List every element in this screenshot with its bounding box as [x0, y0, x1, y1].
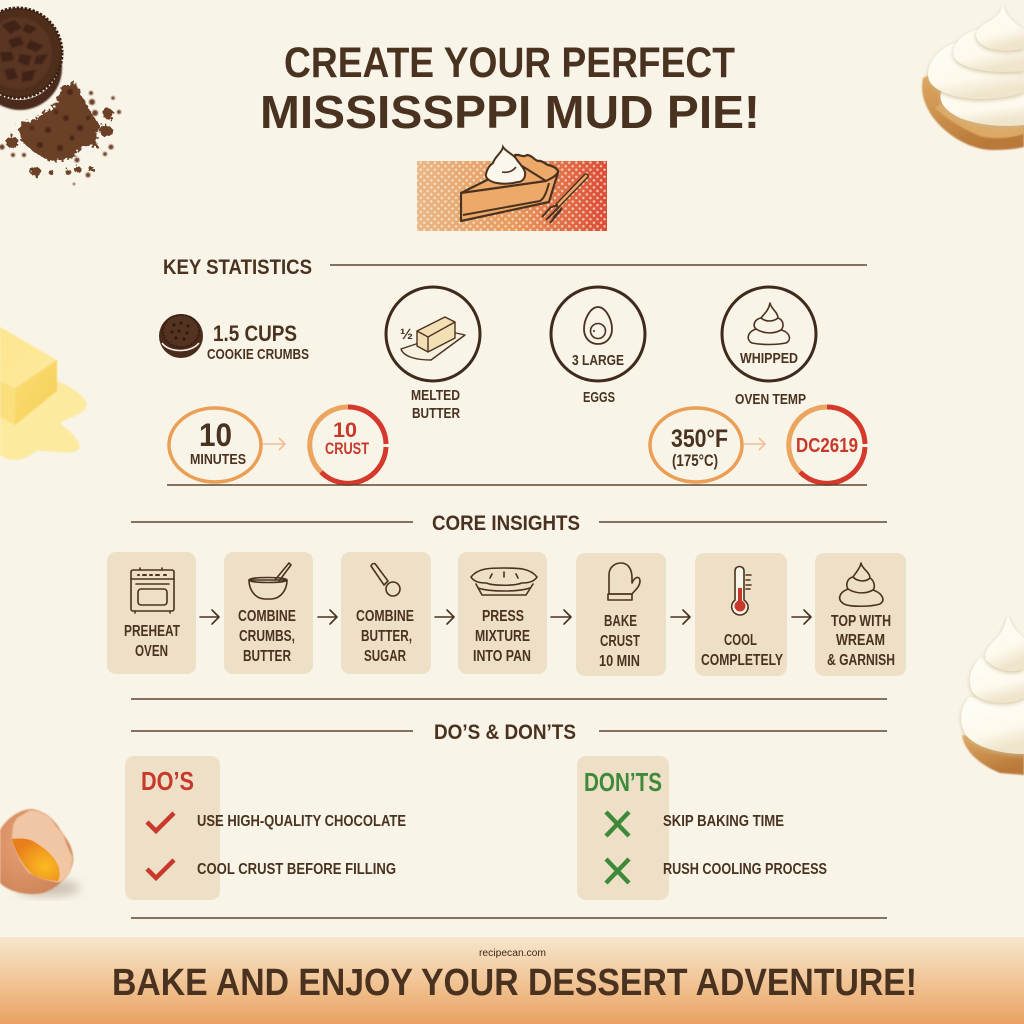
arrow — [435, 610, 454, 624]
step: combine crumbs and butter: CRUMBS, — [239, 628, 295, 645]
arrow — [551, 610, 571, 624]
image: whipped cream tart top right — [922, 5, 1024, 150]
stat: melted butter: BUTTER — [412, 405, 460, 422]
panel: do's — [125, 756, 406, 900]
arrow — [743, 438, 765, 450]
crumb pile — [6, 82, 114, 177]
slice — [461, 155, 558, 221]
icon: spoon — [371, 564, 400, 596]
stat: oven temperature: 350°F — [671, 425, 728, 453]
panel: do's: USE HIGH-QUALITY CHOCOLATE — [197, 813, 406, 830]
step: preheat oven: PREHEAT — [124, 623, 180, 640]
title — [260, 39, 760, 138]
step: press mixture into pan: PRESS — [482, 608, 524, 625]
stat: eggs: EGGS — [583, 389, 615, 406]
panel: don'ts: RUSH COOLING PROCESS — [663, 861, 827, 878]
arrow — [792, 610, 811, 624]
stat: eggs — [551, 287, 645, 406]
step: cool completely — [695, 553, 787, 676]
illustration: pie slice on halftone band — [417, 147, 607, 231]
step: combine butter and sugar: BUTTER, — [361, 628, 412, 645]
stat: oven temperature — [650, 407, 865, 483]
image: cracked egg — [0, 809, 80, 896]
step: bake crust: BAKE — [604, 613, 637, 630]
panel: don'ts: DON’TS — [584, 767, 662, 797]
step: top with cream and garnish: & GARNISH — [827, 652, 895, 669]
icon: oven — [131, 568, 174, 613]
step: press mixture into pan: MIXTURE — [475, 628, 530, 645]
icon: check — [147, 813, 174, 831]
panel: do's: DO’S — [141, 766, 194, 796]
stat: cookie crumbs: 1.5 CUPS — [213, 321, 297, 346]
icon: thermometer — [732, 566, 751, 615]
panel: don'ts: SKIP BAKING TIME — [663, 813, 784, 830]
step: combine butter and sugar — [341, 552, 431, 674]
icon: pie — [471, 568, 537, 595]
image: melted butter — [0, 327, 87, 460]
step: cool completely: COMPLETELY — [701, 652, 783, 669]
step: combine butter and sugar: SUGAR — [364, 648, 406, 665]
footer banner: recipecan.com — [479, 948, 546, 959]
step: top with cream and garnish: WREAM — [836, 632, 885, 649]
ring: crust: CRUST — [325, 439, 369, 458]
step: combine crumbs and butter: COMBINE — [238, 608, 296, 625]
icon: mixing bowl — [249, 563, 291, 599]
image: whipped cream tart right — [961, 615, 1024, 775]
step: press mixture into pan: INTO PAN — [473, 648, 531, 665]
step: top with cream and garnish: TOP WITH — [831, 613, 891, 630]
arrow — [318, 610, 337, 624]
stat: whipped cream: OVEN TEMP — [735, 391, 806, 408]
icon: egg — [584, 307, 612, 344]
step: combine butter and sugar: COMBINE — [356, 608, 414, 625]
step: bake crust: CRUST — [600, 633, 640, 650]
footer banner — [0, 937, 1024, 1024]
step: bake crust: 10 MIN — [599, 653, 640, 670]
whipped topping — [486, 147, 525, 184]
step: combine crumbs and butter: BUTTER — [243, 648, 291, 665]
footer banner: BAKE AND ENJOY YOUR DESSERT ADVENTURE! — [112, 962, 917, 1004]
stat: 10 minutes crust time: MINUTES — [190, 451, 246, 468]
step: preheat oven: OVEN — [135, 643, 168, 660]
heading: key statistics: KEY STATISTICS — [163, 256, 312, 279]
stat: whipped cream — [722, 287, 816, 408]
icon: check — [147, 860, 174, 878]
arrow — [200, 610, 219, 624]
stat: 10 minutes crust time: 10 — [199, 417, 232, 453]
panel: do's: COOL CRUST BEFORE FILLING — [197, 861, 396, 878]
icon: oven mitt — [608, 563, 640, 600]
stat: melted butter — [386, 287, 480, 422]
step: cool completely: COOL — [724, 632, 757, 649]
icon: whipped swirl — [840, 563, 883, 606]
ring: colour code: DC2619 — [796, 435, 858, 457]
arrow — [262, 438, 285, 450]
stat: whipped cream: WHIPPED — [740, 350, 798, 367]
icon: whipped swirl — [748, 303, 789, 344]
heading: core insights: CORE INSIGHTS — [432, 512, 580, 535]
arrow — [671, 610, 690, 624]
step: combine crumbs and butter — [224, 552, 313, 674]
panel: don'ts — [577, 756, 827, 900]
title: CREATE YOUR PERFECT — [284, 39, 735, 87]
stat: oven temperature: (175°C) — [672, 451, 718, 470]
image: cookie and crumbs — [0, 8, 121, 185]
fork — [558, 176, 586, 205]
step: preheat oven — [107, 552, 196, 674]
ring: crust — [310, 407, 386, 483]
title: MISSISSPPI MUD PIE! — [260, 86, 760, 138]
heading: do's and don'ts: DO’S & DON’TS — [434, 721, 576, 744]
icon: cookie — [159, 314, 203, 358]
step: press mixture into pan — [458, 552, 547, 674]
stat: melted butter: MELTED — [411, 387, 460, 404]
icon: butter on dish: ½ — [400, 326, 413, 343]
step: bake crust — [576, 553, 666, 676]
stat: 10 minutes crust time — [169, 407, 386, 483]
stat: cookie crumbs — [159, 314, 309, 363]
icon: cross — [606, 859, 629, 883]
icon: cross — [606, 812, 629, 836]
ring: colour code — [789, 407, 865, 483]
ring: crust: 10 — [333, 419, 357, 442]
stat: cookie crumbs: COOKIE CRUMBS — [207, 346, 309, 363]
stat: eggs: 3 LARGE — [572, 352, 624, 369]
step: top with cream and garnish — [815, 553, 906, 676]
